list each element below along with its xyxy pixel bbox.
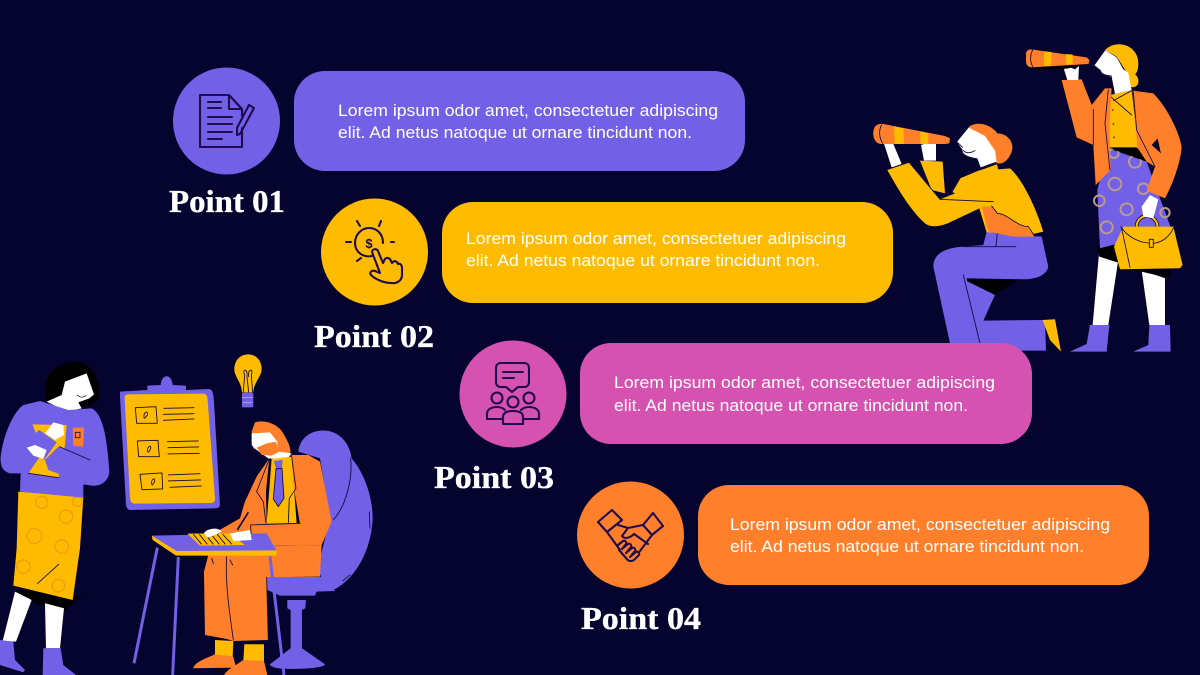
text pill: point 04: elit. Ad netus natoque ut ornare tincidunt non. bbox=[730, 537, 1084, 556]
panel: point 03 bbox=[434, 340, 1032, 495]
panel: point 04 bbox=[577, 482, 1149, 636]
text pill: point 04 bbox=[698, 485, 1149, 585]
standing woman with folder bbox=[0, 362, 109, 675]
text pill: point 01 bbox=[294, 71, 745, 171]
text pill: point 01: Lorem ipsum odor amet, consectetuer adipiscing bbox=[338, 101, 718, 120]
heading: point 03: Point 03 bbox=[434, 459, 554, 495]
illustration: woman and seated man with clipboard bbox=[0, 354, 373, 675]
text pill: point 03: elit. Ad netus natoque ut ornare tincidunt non. bbox=[614, 396, 968, 415]
panel: point 02 bbox=[314, 198, 893, 354]
text pill: point 03: Lorem ipsum odor amet, consectetuer adipiscing bbox=[614, 373, 995, 392]
heading: point 04: Point 04 bbox=[581, 600, 701, 636]
icon: coin and pointing hand: $ bbox=[365, 236, 373, 251]
clipboard bbox=[120, 376, 220, 510]
panel: point 01 bbox=[169, 68, 745, 219]
heading: point 01: Point 01 bbox=[169, 183, 285, 219]
kneeling woman bbox=[873, 124, 1061, 352]
icon: handshake bbox=[577, 482, 684, 588]
text pill: point 03 bbox=[580, 343, 1032, 444]
icon: audience with speech bubble bbox=[460, 340, 566, 448]
text pill: point 02: Lorem ipsum odor amet, consectetuer adipiscing bbox=[466, 229, 846, 248]
text pill: point 02 bbox=[442, 202, 893, 303]
seated man at desk bbox=[134, 422, 373, 675]
icon: document and pen bbox=[173, 68, 280, 174]
heading: point 02: Point 02 bbox=[314, 318, 434, 354]
text pill: point 01: elit. Ad netus natoque ut ornare tincidunt non. bbox=[338, 123, 692, 142]
icon: coin and pointing hand bbox=[321, 198, 428, 306]
illustration: two women with telescopes bbox=[873, 44, 1183, 352]
text pill: point 02: elit. Ad netus natoque ut ornare tincidunt non. bbox=[466, 251, 820, 270]
text pill: point 04: Lorem ipsum odor amet, consectetuer adipiscing bbox=[730, 515, 1110, 534]
standing woman bbox=[1026, 44, 1183, 352]
light bulb bbox=[234, 354, 262, 407]
